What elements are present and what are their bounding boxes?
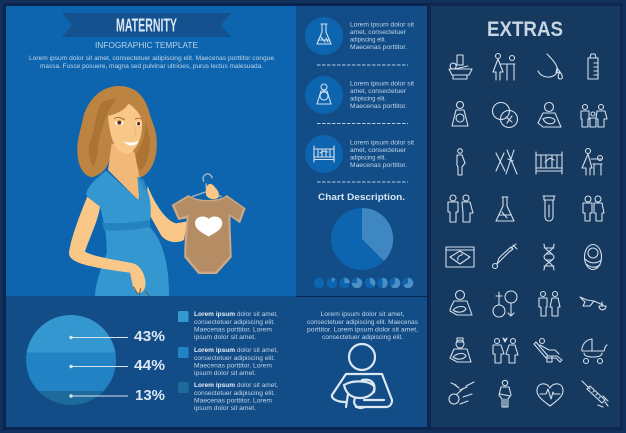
icon: pram [582,339,607,364]
icon: two figures [583,196,604,221]
feature 1: Lorem ipsum dolor sit [350,22,414,28]
feature 2 [305,76,414,114]
legend: Lorem ipsum dolor sit amet, [194,382,278,389]
icon: mother with baby [538,102,561,127]
percent labels: 13% [135,387,165,404]
feature 1: amet, consectetuer [350,29,407,36]
panel: right column [296,6,427,296]
icon: delivery chair [534,338,562,362]
bottom edge of dress [6,296,296,298]
legend: consectetuer adipiscing elit. [194,355,275,362]
panel: extras [431,6,620,427]
icon: baby bottle [588,54,598,79]
icon: nurse holding baby [450,338,471,362]
feature 3: Maecenas porttitor. [350,162,407,169]
legend: Lorem ipsum dolor sit amet, [194,311,278,318]
icon: couple with heart [493,338,518,363]
intro text: Lorem ipsum dolor sit amet, consectetuer adipiscing elit. Maecenas porttitor congue [29,55,274,62]
icon: sperm and egg [449,382,474,404]
legend: ipsum dolor sit amet. [194,405,256,412]
icon: pregnant figure [452,102,468,126]
legend: consectetuer adipiscing elit. [194,319,275,326]
intro text [29,55,274,70]
bottom middle text [307,311,419,341]
feature 1: Maecenas porttitor. [350,44,407,51]
illustration: pregnant woman holding onesie [69,86,246,297]
icon: man and woman [539,292,560,316]
icon: heartbeat heart [537,384,563,406]
icon: ultrasound screen [446,247,474,267]
band pie chart [26,315,128,405]
feature 3 [305,135,414,173]
subtitle: INFOGRAPHIC TEMPLATE [95,40,198,50]
icon: iv drip curve [538,54,562,79]
title banner [62,13,231,37]
icon: syringe small [492,244,517,268]
legend: Maecenas porttitor. Lorem [194,398,273,404]
icon: family [581,104,607,127]
bottom middle text: Lorem ipsum dolor sit amet, [320,311,405,318]
feature 1: adipiscing elit. [350,36,386,44]
icon: syringe [582,381,608,407]
legend: consectetuer adipiscing elit. [194,390,275,397]
feature 2: Maecenas porttitor. [350,103,407,110]
feature 3: adipiscing elit. [350,154,386,162]
icon: gender symbols [493,291,517,317]
icon: nurse and patient [493,54,515,80]
legend: Lorem ipsum dolor sit amet, [194,347,278,354]
legend: ipsum dolor sit amet. [194,370,256,377]
hanger [192,174,222,197]
icon: hospital bed [449,55,472,79]
icon: swaddled baby [584,244,602,270]
icon: chromosomes [496,150,517,174]
onesie [172,195,246,274]
panel: hero [6,6,296,296]
feature 2: adipiscing elit. [350,96,386,102]
icon: parent holding baby [450,290,472,315]
icon: breastfeeding mother [332,344,392,408]
icon: flask [496,197,514,221]
bottom middle text: porttitor. Lorem ipsum dolor sit amet, [307,326,418,334]
legend: ipsum dolor sit amet. [194,334,256,341]
feature 2: amet, consectetuer [350,88,407,95]
left arm [69,197,145,293]
pie chart [331,208,393,270]
bottom middle text: consectetuer adipiscing elit. [322,334,403,341]
icon: pregnant silhouette [457,149,465,175]
dress [86,171,169,297]
legend: Maecenas porttitor. Lorem [194,326,273,334]
feature 3: amet, consectetuer [350,147,407,154]
small pie row [314,278,413,288]
icon: person with child [582,148,602,175]
title banner: MATERNITY [116,16,177,36]
icon: couple [448,195,473,222]
panel: bottom [6,297,427,427]
percent labels: 43% [134,328,165,345]
feature 2: Lorem ipsum dolor sit [350,80,414,88]
icon: test tube [543,196,555,221]
feature 3: Lorem ipsum dolor sit [350,140,414,146]
legend [178,311,278,412]
bottom middle text: consectetuer adipiscing elit. Maecenas [307,319,419,326]
icon: stork [580,297,606,310]
icon: pregnant woman [499,380,511,407]
feature 1 [305,17,414,55]
legend: Maecenas porttitor. Lorem [194,362,273,370]
icon: crib [536,152,562,174]
chart heading: Chart Description. [318,192,405,203]
heading: extras: EXTRAS [487,18,563,41]
right arm [145,186,187,242]
intro text: massa. Fusce posuere, magna sed pulvinar ultricies, purus lectus malesuada. [40,63,263,70]
icon: cells [492,102,518,128]
icon grid [446,54,608,407]
percent labels [134,328,165,404]
icon: dna [544,244,554,270]
percent labels: 44% [134,357,165,374]
